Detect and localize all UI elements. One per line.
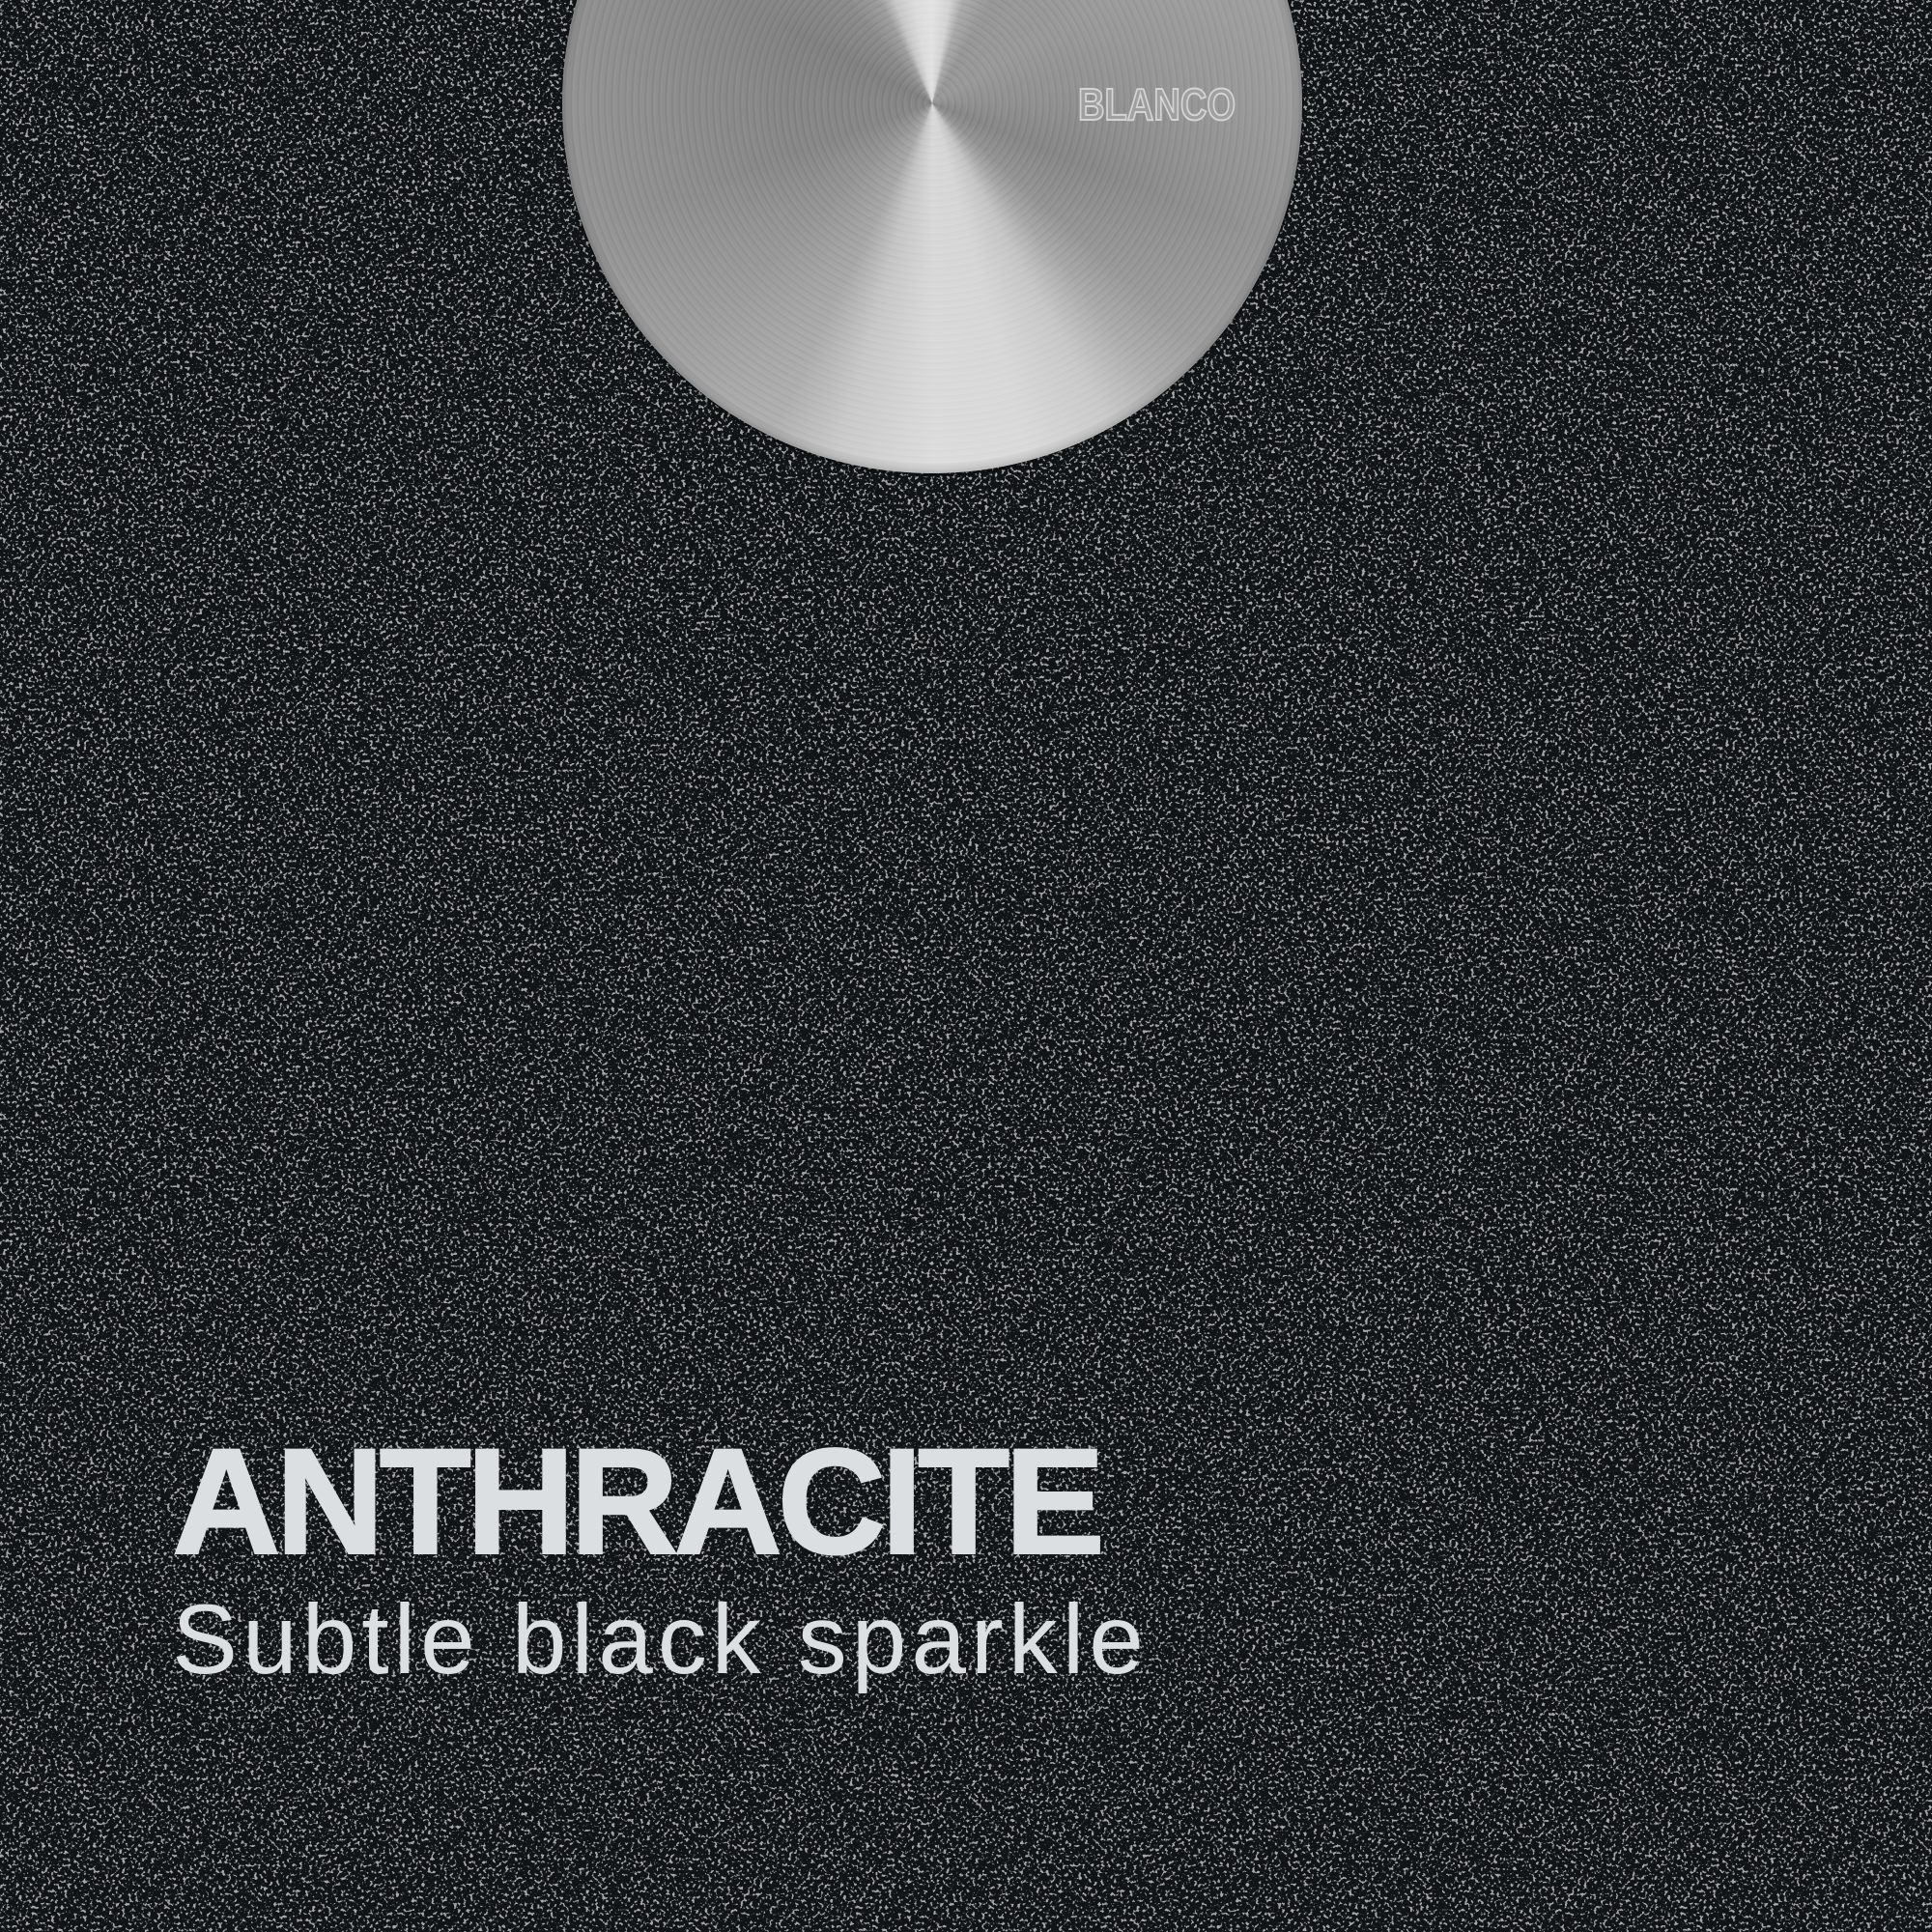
embossed BLANCO logo: BLANCO (1078, 79, 1236, 129)
icon: brushed stainless steel drain cap (559, 0, 1305, 478)
subtitle: Subtle black sparkle (172, 1584, 1144, 1694)
title: ANTHRACITE (172, 1418, 1105, 1586)
